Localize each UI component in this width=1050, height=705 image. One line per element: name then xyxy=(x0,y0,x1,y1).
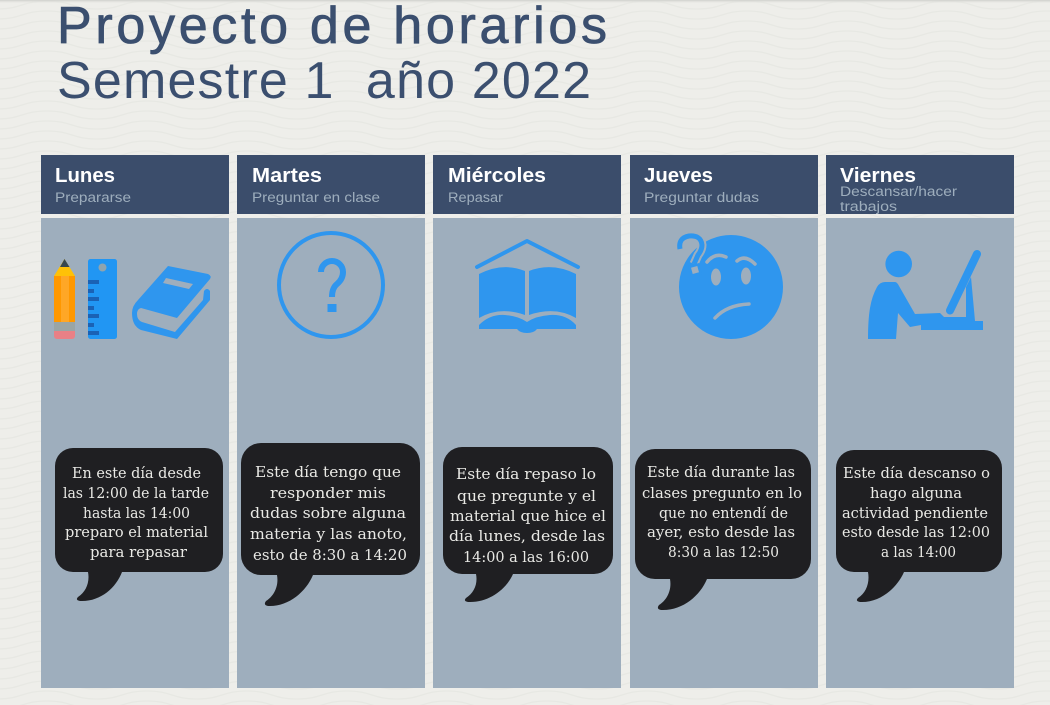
speech bubble: Jueves: Este día durante las xyxy=(647,465,795,481)
speech bubble: Jueves: clases pregunto en lo xyxy=(642,486,802,502)
header: Martes: Martes xyxy=(252,165,322,187)
speech bubble: Lunes: hasta las 14:00 xyxy=(83,506,190,522)
speech bubble: Martes: materia y las anoto, xyxy=(250,527,407,543)
icon: pencil, ruler and book xyxy=(54,259,211,339)
speech bubble: Miércoles: día lunes, desde las xyxy=(449,529,605,545)
title xyxy=(57,0,607,110)
speech bubble: Martes: Este día tengo que xyxy=(255,465,401,481)
header: Jueves: Preguntar dudas xyxy=(644,190,759,205)
speech bubble: Viernes xyxy=(836,450,1002,602)
header: Viernes: trabajos xyxy=(840,199,897,214)
panel: Viernes xyxy=(826,155,1014,688)
speech bubble: Lunes: las 12:00 de la tarde xyxy=(63,486,209,502)
speech bubble: Lunes xyxy=(55,448,223,601)
speech bubble: Lunes: En este día desde xyxy=(72,466,201,482)
header: Miércoles: Repasar xyxy=(448,190,504,205)
icon: confused face xyxy=(679,235,783,339)
header: Viernes: Descansar/hacer xyxy=(840,184,958,199)
header: Viernes: Viernes xyxy=(840,165,916,187)
panel: Martes xyxy=(237,155,425,688)
column body: Jueves xyxy=(630,218,818,688)
speech bubble: Miércoles: material que hice el xyxy=(450,509,606,525)
column body: Viernes xyxy=(826,218,1014,688)
speech bubble: Jueves: 8:30 a las 12:50 xyxy=(668,545,779,561)
header: Martes xyxy=(237,155,425,214)
speech bubble: Miércoles: 14:00 a las 16:00 xyxy=(463,550,589,566)
header: Lunes: Lunes xyxy=(55,165,115,187)
column body: Martes xyxy=(237,218,425,688)
icon: person at computer xyxy=(868,251,983,339)
icon: question mark in circle xyxy=(279,233,383,337)
header: Miércoles xyxy=(433,155,621,214)
speech bubble: Viernes: esto desde las 12:00 xyxy=(842,525,990,541)
panel: Lunes xyxy=(41,155,229,688)
speech bubble: Jueves: que no entendí de xyxy=(659,506,788,522)
speech bubble: Jueves: ayer, esto desde las xyxy=(647,525,795,541)
speech bubble: Miércoles: Este día repaso lo xyxy=(456,467,596,483)
panel: Miércoles xyxy=(433,155,621,688)
column body: Lunes xyxy=(41,218,229,688)
speech bubble: Viernes: Este día descanso o xyxy=(843,466,990,482)
heading: Semestre 1 año 2022: Semestre 1 año 2022 xyxy=(57,52,591,110)
speech bubble: Martes: esto de 8:30 a 14:20 xyxy=(253,548,407,564)
header: Viernes xyxy=(826,155,1014,214)
header: Jueves xyxy=(630,155,818,214)
speech bubble: Viernes: hago alguna xyxy=(870,486,962,502)
panel: Jueves xyxy=(630,155,818,688)
column body: Miércoles xyxy=(433,218,621,688)
header: Lunes: Prepararse xyxy=(55,190,131,205)
speech bubble: Jueves xyxy=(635,449,811,610)
speech bubble: Martes: responder mis xyxy=(270,486,386,502)
speech bubble: Lunes: preparo el material xyxy=(65,525,208,541)
speech bubble: Martes: dudas sobre alguna xyxy=(250,506,406,522)
speech bubble: Martes xyxy=(241,443,420,606)
icon: open book under roof xyxy=(477,241,578,333)
header: Miércoles: Miércoles xyxy=(448,165,546,187)
speech bubble: Lunes: para repasar xyxy=(90,545,187,561)
header: Lunes xyxy=(41,155,229,214)
speech bubble: Viernes: a las 14:00 xyxy=(881,545,956,561)
speech bubble: Viernes: actividad pendiente xyxy=(842,506,988,522)
speech bubble: Miércoles: que pregunte y el xyxy=(457,489,596,505)
header: Jueves: Jueves xyxy=(644,165,713,187)
header: Martes: Preguntar en clase xyxy=(252,190,380,205)
speech bubble: Miércoles xyxy=(443,447,613,602)
